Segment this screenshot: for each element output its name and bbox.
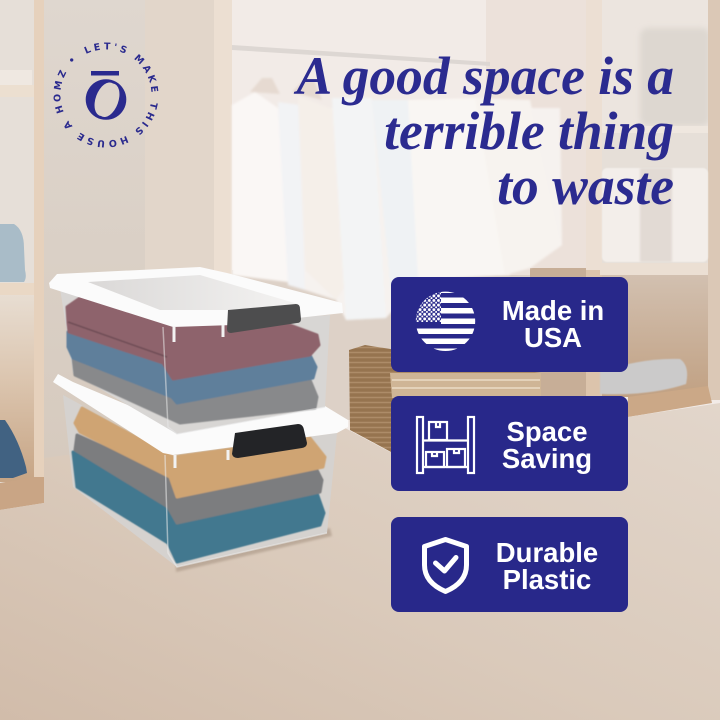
back wall — [0, 0, 720, 480]
icon: US flag circle — [415, 291, 477, 352]
label: Durable — [496, 537, 598, 568]
floor shadow — [176, 528, 332, 572]
wood column — [145, 0, 215, 275]
teal sweater — [73, 452, 324, 562]
stacked storage boxes — [49, 267, 348, 572]
tan sweater — [75, 408, 325, 497]
label: Plastic — [503, 564, 591, 595]
hanging shirts — [232, 78, 562, 320]
logo ring mark — [86, 79, 126, 120]
clothes rail — [232, 45, 490, 66]
folded plastic bag — [600, 359, 687, 394]
lower clips — [175, 450, 228, 468]
headline — [294, 46, 674, 216]
lower wall — [232, 270, 602, 420]
badge panel — [391, 277, 628, 372]
badge panel — [391, 396, 628, 491]
lower latch — [232, 424, 307, 458]
upper clips — [174, 325, 223, 342]
left shelving unit — [0, 0, 44, 510]
icon: shield with check — [424, 540, 466, 592]
headline: to waste — [497, 156, 674, 216]
upper box — [49, 267, 343, 434]
headline: A good space is a — [294, 46, 674, 106]
logo bar — [91, 71, 119, 76]
gray sweater — [73, 358, 317, 423]
badge: space saving — [391, 396, 628, 491]
carpet floor — [0, 396, 720, 720]
label: Made in — [502, 295, 604, 326]
badge panel — [391, 517, 628, 612]
circular tagline: LET'S MAKE THIS HOUSE A HOMZ • — [54, 42, 158, 148]
headline: terrible thing — [384, 101, 674, 161]
lower box — [53, 374, 348, 567]
badge: durable plastic — [391, 517, 628, 612]
right shelving unit — [486, 0, 720, 417]
label: Space — [506, 416, 588, 447]
upper latch — [227, 304, 301, 333]
label: Saving — [502, 443, 592, 474]
upper lid — [49, 267, 343, 327]
upper lid panel — [88, 275, 298, 310]
plum sweater — [67, 298, 319, 379]
blue sweater — [68, 332, 316, 403]
wicker basket — [349, 345, 541, 452]
left alcove wall — [44, 0, 145, 470]
gray sweater — [75, 435, 322, 523]
badge: made in USA — [391, 277, 628, 372]
logo badge — [54, 42, 158, 148]
upper box clear front corner — [163, 327, 325, 434]
label: USA — [524, 322, 582, 353]
lower box folded clothes — [73, 408, 325, 562]
lower box clear front corner — [165, 455, 327, 567]
lower box body — [63, 395, 337, 567]
plum fold — [68, 322, 167, 357]
upper box body — [60, 288, 330, 434]
icon: shelf with boxes — [417, 417, 474, 473]
lower lid — [53, 374, 348, 455]
upper box folded clothes — [67, 298, 319, 423]
